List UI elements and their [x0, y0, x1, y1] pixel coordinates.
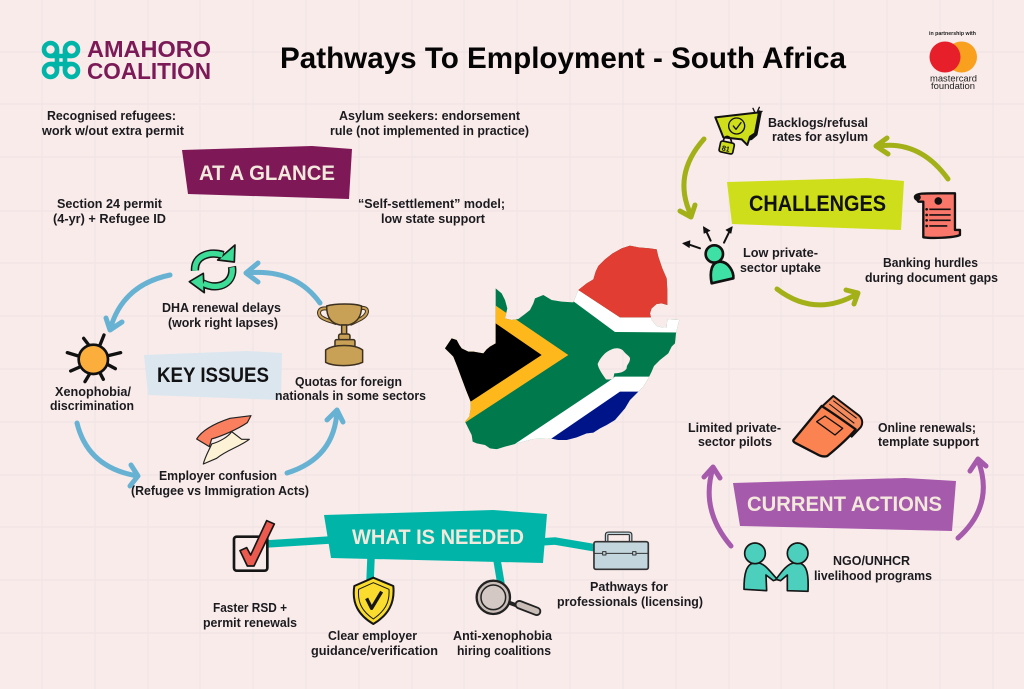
title: Pathways To Employment - South Africa [280, 42, 846, 75]
logo: Mastercard Foundation: mastercard [930, 74, 977, 84]
icon: renewal arrows [189, 245, 235, 293]
text: DHA renewal delays: DHA renewal delays [162, 300, 281, 315]
text: quotas: nationals in some sectors [275, 388, 426, 403]
text: xenophobia [50, 384, 134, 413]
text: backlogs: Backlogs/refusal [768, 115, 868, 130]
arrows: challenges cycle [680, 138, 948, 305]
text: quotas [275, 374, 426, 403]
icon: briefcase [594, 533, 648, 569]
text: section 24 permit: Section 24 permit [57, 196, 163, 211]
text: backlogs [768, 115, 868, 144]
text: anti-xenophobia: hiring coalitions [457, 643, 551, 658]
text: section 24 permit: (4-yr) + Refugee ID [53, 211, 166, 226]
logo wordmark [87, 36, 211, 84]
logo: Mastercard Foundation [929, 31, 977, 91]
icon: speech bubble with lock: 81 [721, 143, 731, 154]
text: pathways for professionals: Pathways for [590, 579, 668, 594]
heading banner: current actions: CURRENT ACTIONS [747, 492, 942, 516]
text: clear employer guidance [311, 628, 438, 658]
panel: key issues [50, 245, 426, 498]
icon: person with arrows [683, 227, 733, 283]
text: NGO/UNHCR: NGO/UNHCR [833, 553, 911, 568]
text: self-settlement: “Self-settlement” model; [358, 196, 505, 211]
icon: people shaking hands [744, 543, 808, 591]
icon: trophy [319, 304, 367, 366]
text: xenophobia: discrimination [50, 398, 134, 413]
text: clear employer guidance: Clear employer [328, 628, 417, 643]
logo: Mastercard Foundation: in partnership with [929, 31, 976, 37]
text: recognised refugees [41, 108, 185, 138]
icon: book [793, 396, 862, 457]
text: NGO/UNHCR [814, 553, 932, 583]
heading banner: key issues: KEY ISSUES [157, 363, 269, 387]
text: online renewals: Online renewals; [878, 420, 976, 435]
text: pathways for professionals: professionals (licensing) [557, 594, 703, 609]
text: quotas: Quotas for foreign [295, 374, 402, 389]
icon: magnifier [477, 581, 537, 614]
heading banner: challenges: CHALLENGES [749, 191, 886, 216]
text: banking hurdles: Banking hurdles [883, 255, 978, 270]
text: low private-sector uptake [740, 245, 821, 275]
heading banner: challenges [727, 178, 904, 230]
icon: ribbons [197, 416, 251, 464]
text: DHA renewal delays [162, 300, 281, 330]
arrows: current actions [704, 459, 986, 546]
panel: current actions [688, 396, 986, 591]
panel: what is needed [203, 510, 703, 658]
text: section 24 permit [53, 196, 166, 226]
text: employer confusion [131, 468, 309, 498]
text: limited pilots [688, 420, 781, 449]
heading banner: what is needed: WHAT IS NEEDED [352, 525, 524, 549]
heading banner: current actions [733, 478, 956, 531]
icon: speech bubble with lock [715, 107, 762, 154]
text: DHA renewal delays: (work right lapses) [168, 315, 278, 330]
text: banking hurdles [865, 255, 998, 285]
text: asylum seekers: rule (not implemented in practice) [330, 123, 529, 138]
text: asylum seekers: Asylum seekers: endorsement [339, 108, 521, 123]
text: employer confusion: (Refugee vs Immigration Acts) [131, 483, 309, 498]
text: faster RSD [203, 600, 297, 630]
text: limited pilots: sector pilots [698, 434, 772, 449]
icon: checkbox [234, 521, 274, 571]
arrows: key issues cycle [77, 263, 343, 486]
panel: challenges [680, 107, 998, 305]
text: recognised refugees: Recognised refugees: [47, 108, 176, 123]
text: faster RSD: Faster RSD + [213, 600, 287, 615]
icon: shield [354, 578, 394, 624]
text: xenophobia: Xenophobia/ [55, 384, 131, 399]
logo: Amahoro Coalition [44, 36, 211, 84]
icon: logo mark [44, 43, 78, 77]
panel: South Africa flag map [445, 246, 680, 450]
text: online renewals: template support [878, 434, 980, 449]
heading banner: key issues [144, 351, 282, 400]
icon: sun [67, 335, 121, 382]
text: anti-xenophobia [453, 628, 553, 658]
text: NGO/UNHCR: livelihood programs [814, 568, 932, 583]
text: self-settlement [358, 196, 505, 226]
text: employer confusion: Employer confusion [159, 468, 277, 483]
text: recognised refugees: work w/out extra permit [41, 123, 185, 138]
panel: at a glance [41, 108, 529, 226]
text: anti-xenophobia: Anti-xenophobia [453, 628, 553, 643]
text: banking hurdles: during document gaps [865, 270, 998, 285]
icon: scroll document [914, 193, 960, 238]
text: clear employer guidance: guidance/verification [311, 643, 438, 658]
connectors [266, 540, 596, 584]
text: asylum seekers [330, 108, 529, 138]
logo: Mastercard Foundation: foundation [931, 81, 975, 91]
text: faster RSD: permit renewals [203, 615, 297, 630]
logo wordmark: COALITION [87, 58, 211, 84]
text: pathways for professionals [557, 579, 703, 609]
text: low private-sector uptake: Low private- [743, 245, 818, 260]
text: low private-sector uptake: sector uptake [740, 260, 821, 275]
heading banner: what is needed [324, 510, 547, 563]
logo wordmark: AMAHORO [87, 36, 211, 62]
text: online renewals [878, 420, 980, 449]
heading banner: at a glance [182, 146, 352, 199]
heading banner: at a glance: AT A GLANCE [199, 161, 335, 185]
text: self-settlement: low state support [381, 211, 486, 226]
text: backlogs: rates for asylum [772, 129, 868, 144]
text: limited pilots: Limited private- [688, 420, 781, 435]
